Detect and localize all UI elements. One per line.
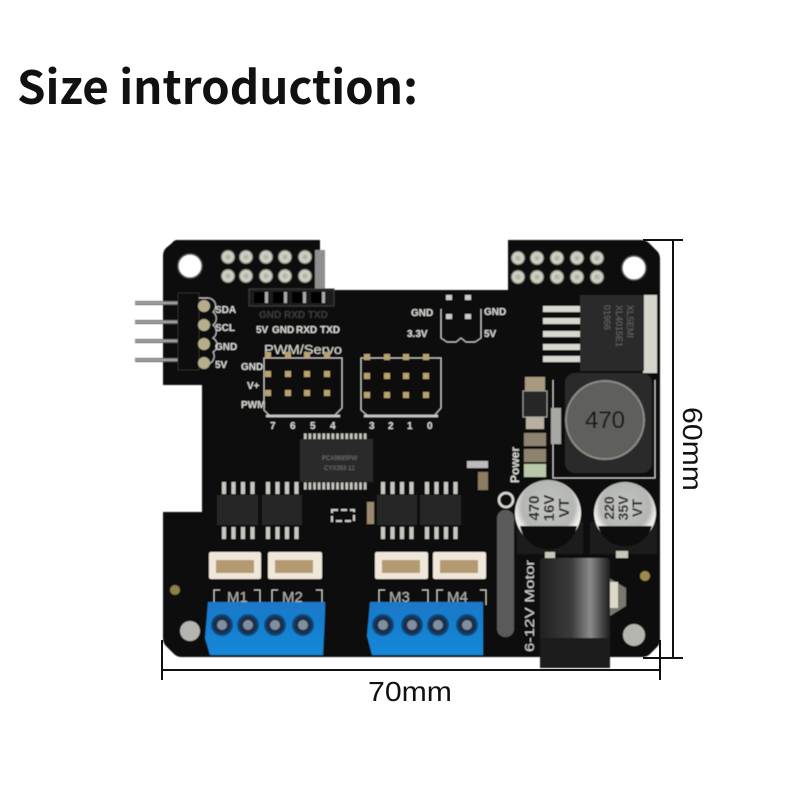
capacitor 220uF: 220 — [601, 496, 617, 520]
PWM/Servo header group left: GND — [241, 362, 263, 373]
voltage regulator: XL4015E1 — [614, 305, 624, 347]
UART header: TXD — [320, 325, 340, 336]
title: Size introduction: — [17, 52, 418, 118]
capacitor 470uF — [515, 480, 583, 554]
board outline — [163, 240, 660, 657]
I2C side header: 5V — [215, 360, 228, 371]
PWM/Servo header group left: 7 — [270, 421, 276, 432]
PWM/Servo header group left: 4 — [330, 421, 336, 432]
SMD diode and resistors — [523, 377, 547, 477]
inductor: 470 — [585, 407, 625, 434]
motor driver chips — [217, 488, 461, 533]
power jumper: 3.3V — [407, 329, 428, 340]
DC power jack — [540, 551, 628, 668]
PWM driver chip: CYX393 12 — [324, 466, 355, 472]
mounting holes — [170, 254, 650, 646]
inductor — [551, 373, 655, 478]
capacitor 220uF: VT — [629, 499, 645, 517]
70mm dimension line — [162, 640, 660, 680]
voltage regulator: 01966 — [602, 305, 612, 330]
power icon — [499, 493, 513, 507]
UART header — [249, 289, 340, 336]
blue terminal block right — [367, 602, 483, 655]
capacitor 470uF: VT — [556, 498, 573, 518]
GPIO pads right — [511, 251, 604, 284]
PWM driver chip — [300, 437, 373, 486]
70mm label: 70mm — [368, 676, 452, 707]
capacitor 220uF — [590, 482, 657, 554]
UART header: GND — [272, 325, 294, 336]
blue terminal block left — [205, 602, 325, 655]
right side of upper-left header block — [315, 250, 325, 290]
power label: Power — [508, 447, 522, 483]
voltage regulator — [543, 295, 657, 373]
white motor connectors — [209, 552, 486, 579]
PWM/Servo header group left: PWM/Servo — [264, 342, 342, 357]
I2C side header: GND — [215, 342, 237, 353]
PWM/Servo header group left: 6 — [290, 421, 296, 432]
PWM/Servo header group left: 5 — [310, 421, 316, 432]
motor labels: M2 — [282, 589, 303, 606]
capacitor 470uF: 16V — [541, 495, 558, 521]
small SMD parts — [332, 461, 488, 524]
silkscreen strip — [497, 510, 514, 637]
power jumper — [407, 295, 506, 342]
PWM/Servo header group left: V+ — [247, 381, 260, 392]
60mm dimension line — [643, 240, 683, 658]
motor labels: M3 — [389, 589, 410, 606]
UART header: GND RXD TXD — [259, 310, 328, 321]
PWM/Servo header group right: 3 — [369, 421, 375, 432]
GPIO pads left — [221, 250, 312, 283]
I2C side header: SCL — [215, 323, 235, 334]
motor labels — [214, 589, 486, 606]
PWM/Servo header group left: PWM — [241, 400, 265, 411]
voltage regulator: XLSEMI — [625, 305, 635, 338]
UART header: 5V — [256, 325, 269, 336]
PWM/Servo header group right: 2 — [388, 421, 394, 432]
PWM/Servo header group right: 0 — [427, 421, 433, 432]
motor labels: M4 — [447, 589, 468, 606]
capacitor 470uF: 470 — [526, 495, 543, 521]
motor voltage label: 6-12V Motor — [522, 559, 537, 652]
60mm label: 60mm — [677, 407, 708, 491]
PWM/Servo header group left — [241, 342, 342, 432]
UART header: RXD — [296, 325, 317, 336]
capacitor 220uF: 35V — [615, 495, 631, 520]
power jumper: GND — [484, 307, 506, 318]
PWM driver chip: PCA9685PW — [322, 456, 358, 462]
PWM/Servo header group right: 1 — [407, 421, 413, 432]
I2C side header — [135, 293, 237, 371]
power jumper: 5V — [484, 329, 497, 340]
motor labels: M1 — [227, 589, 248, 606]
PWM/Servo header group right — [361, 354, 441, 432]
circuit board — [135, 240, 660, 668]
I2C side header: SDA — [215, 305, 236, 316]
power jumper: GND — [411, 308, 433, 319]
